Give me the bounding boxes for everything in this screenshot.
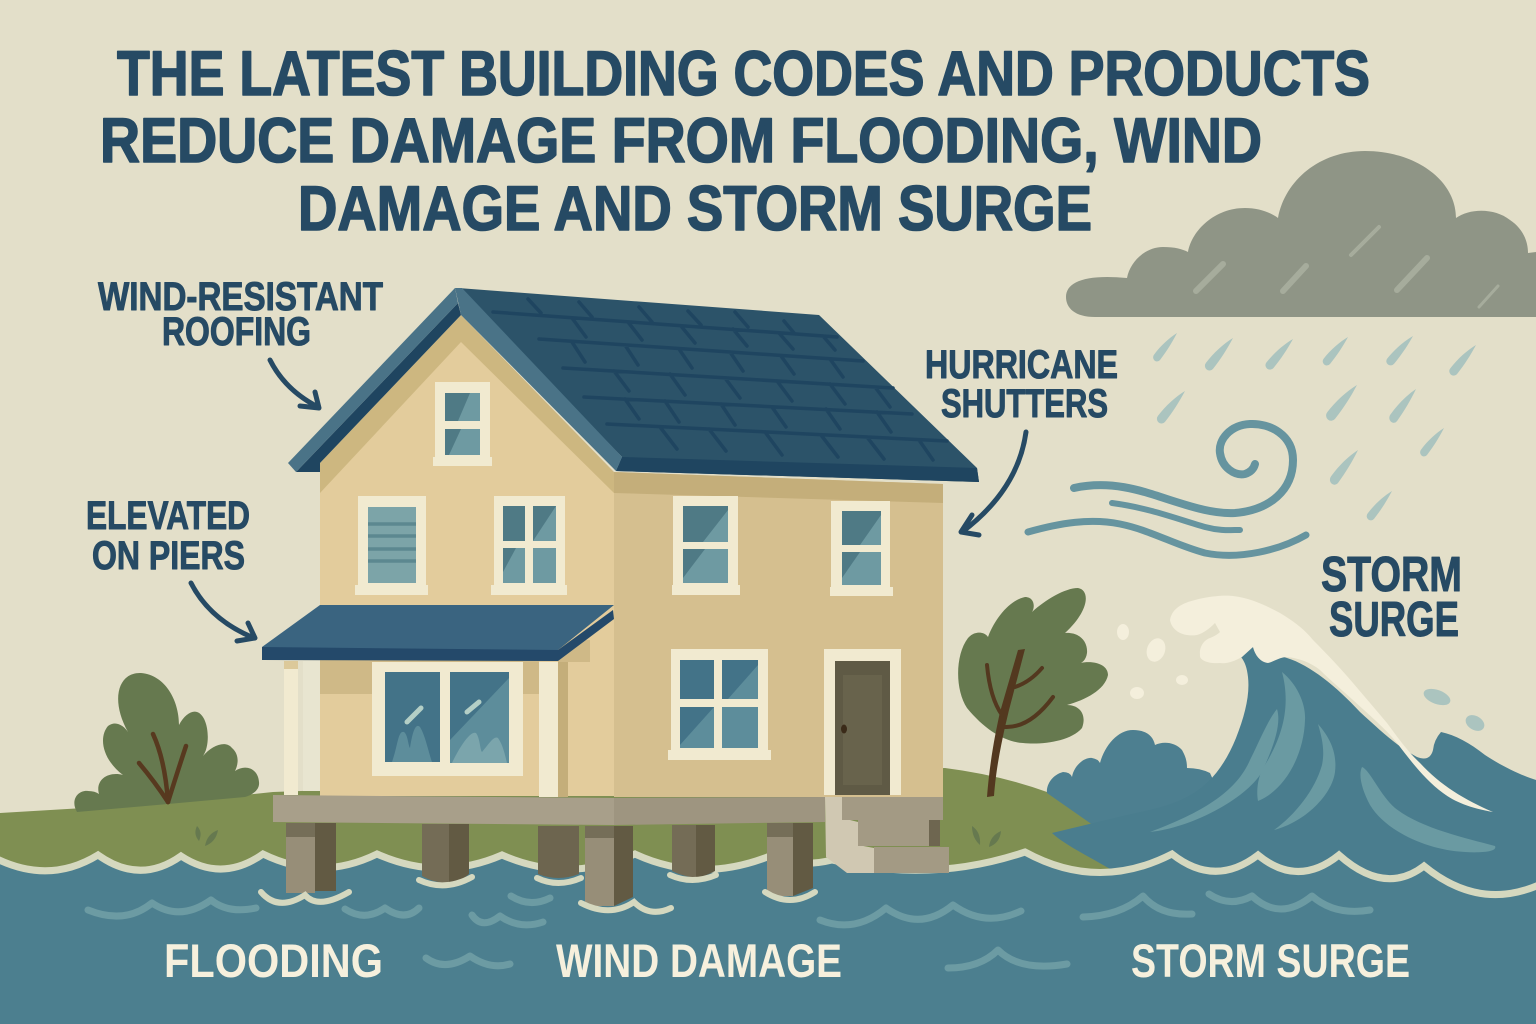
shuttered window bbox=[355, 496, 428, 595]
steps bbox=[825, 797, 949, 873]
label: elevated on piers: ELEVATED bbox=[86, 494, 250, 538]
label: wind-resistant roofing: WIND-RESISTANT bbox=[98, 275, 383, 319]
title: DAMAGE AND STORM SURGE bbox=[298, 174, 1092, 244]
upper window right bbox=[830, 501, 893, 596]
label: storm surge bbox=[1321, 548, 1462, 647]
foundation bbox=[273, 795, 825, 825]
pier foam bbox=[261, 875, 815, 912]
upper window centre bbox=[672, 496, 740, 595]
title bbox=[100, 39, 1370, 244]
label: hurricane shutters: HURRICANE bbox=[925, 343, 1118, 387]
label: wind-resistant roofing bbox=[98, 275, 383, 354]
porch picture window bbox=[372, 662, 523, 776]
spray bbox=[1117, 624, 1188, 699]
roof bbox=[288, 288, 979, 482]
label: elevated on piers: ON PIERS bbox=[92, 534, 245, 578]
icon: left bush bbox=[74, 673, 259, 846]
wave swooshes bbox=[1150, 672, 1495, 852]
porch bbox=[262, 605, 614, 797]
label: storm surge: SURGE bbox=[1329, 593, 1459, 647]
label: flooding: FLOODING bbox=[164, 934, 383, 987]
arrow: to shutters bbox=[961, 432, 1026, 535]
water bbox=[0, 852, 1536, 1024]
icon: wind swirl bbox=[1028, 424, 1306, 555]
icon: right tree bbox=[958, 588, 1108, 847]
walls bbox=[320, 315, 614, 795]
attic window bbox=[433, 382, 492, 466]
ripples bbox=[88, 894, 1370, 968]
arrow: to piers bbox=[191, 583, 255, 641]
icon: rain drops bbox=[1153, 333, 1476, 520]
label: hurricane shutters bbox=[925, 343, 1118, 426]
house bbox=[261, 288, 979, 912]
label: wind damage: WIND DAMAGE bbox=[556, 934, 842, 987]
label: wind-resistant roofing: ROOFING bbox=[162, 310, 311, 354]
door bbox=[824, 649, 901, 795]
icon: storm surge wave bbox=[1047, 596, 1536, 895]
label: storm surge: STORM bbox=[1321, 548, 1462, 602]
label: hurricane shutters: SHUTTERS bbox=[941, 382, 1108, 426]
piers bbox=[286, 823, 813, 906]
upper window left bbox=[491, 496, 567, 595]
ground bbox=[0, 768, 1160, 890]
label: storm surge bottom: STORM SURGE bbox=[1131, 934, 1410, 987]
title: REDUCE DAMAGE FROM FLOODING, WIND bbox=[100, 106, 1262, 176]
arrow: to roof bbox=[270, 360, 319, 408]
label: elevated on piers bbox=[86, 494, 250, 578]
lower window bbox=[668, 649, 771, 760]
icon: storm cloud bbox=[1066, 151, 1536, 317]
foam crest bbox=[1170, 596, 1493, 812]
